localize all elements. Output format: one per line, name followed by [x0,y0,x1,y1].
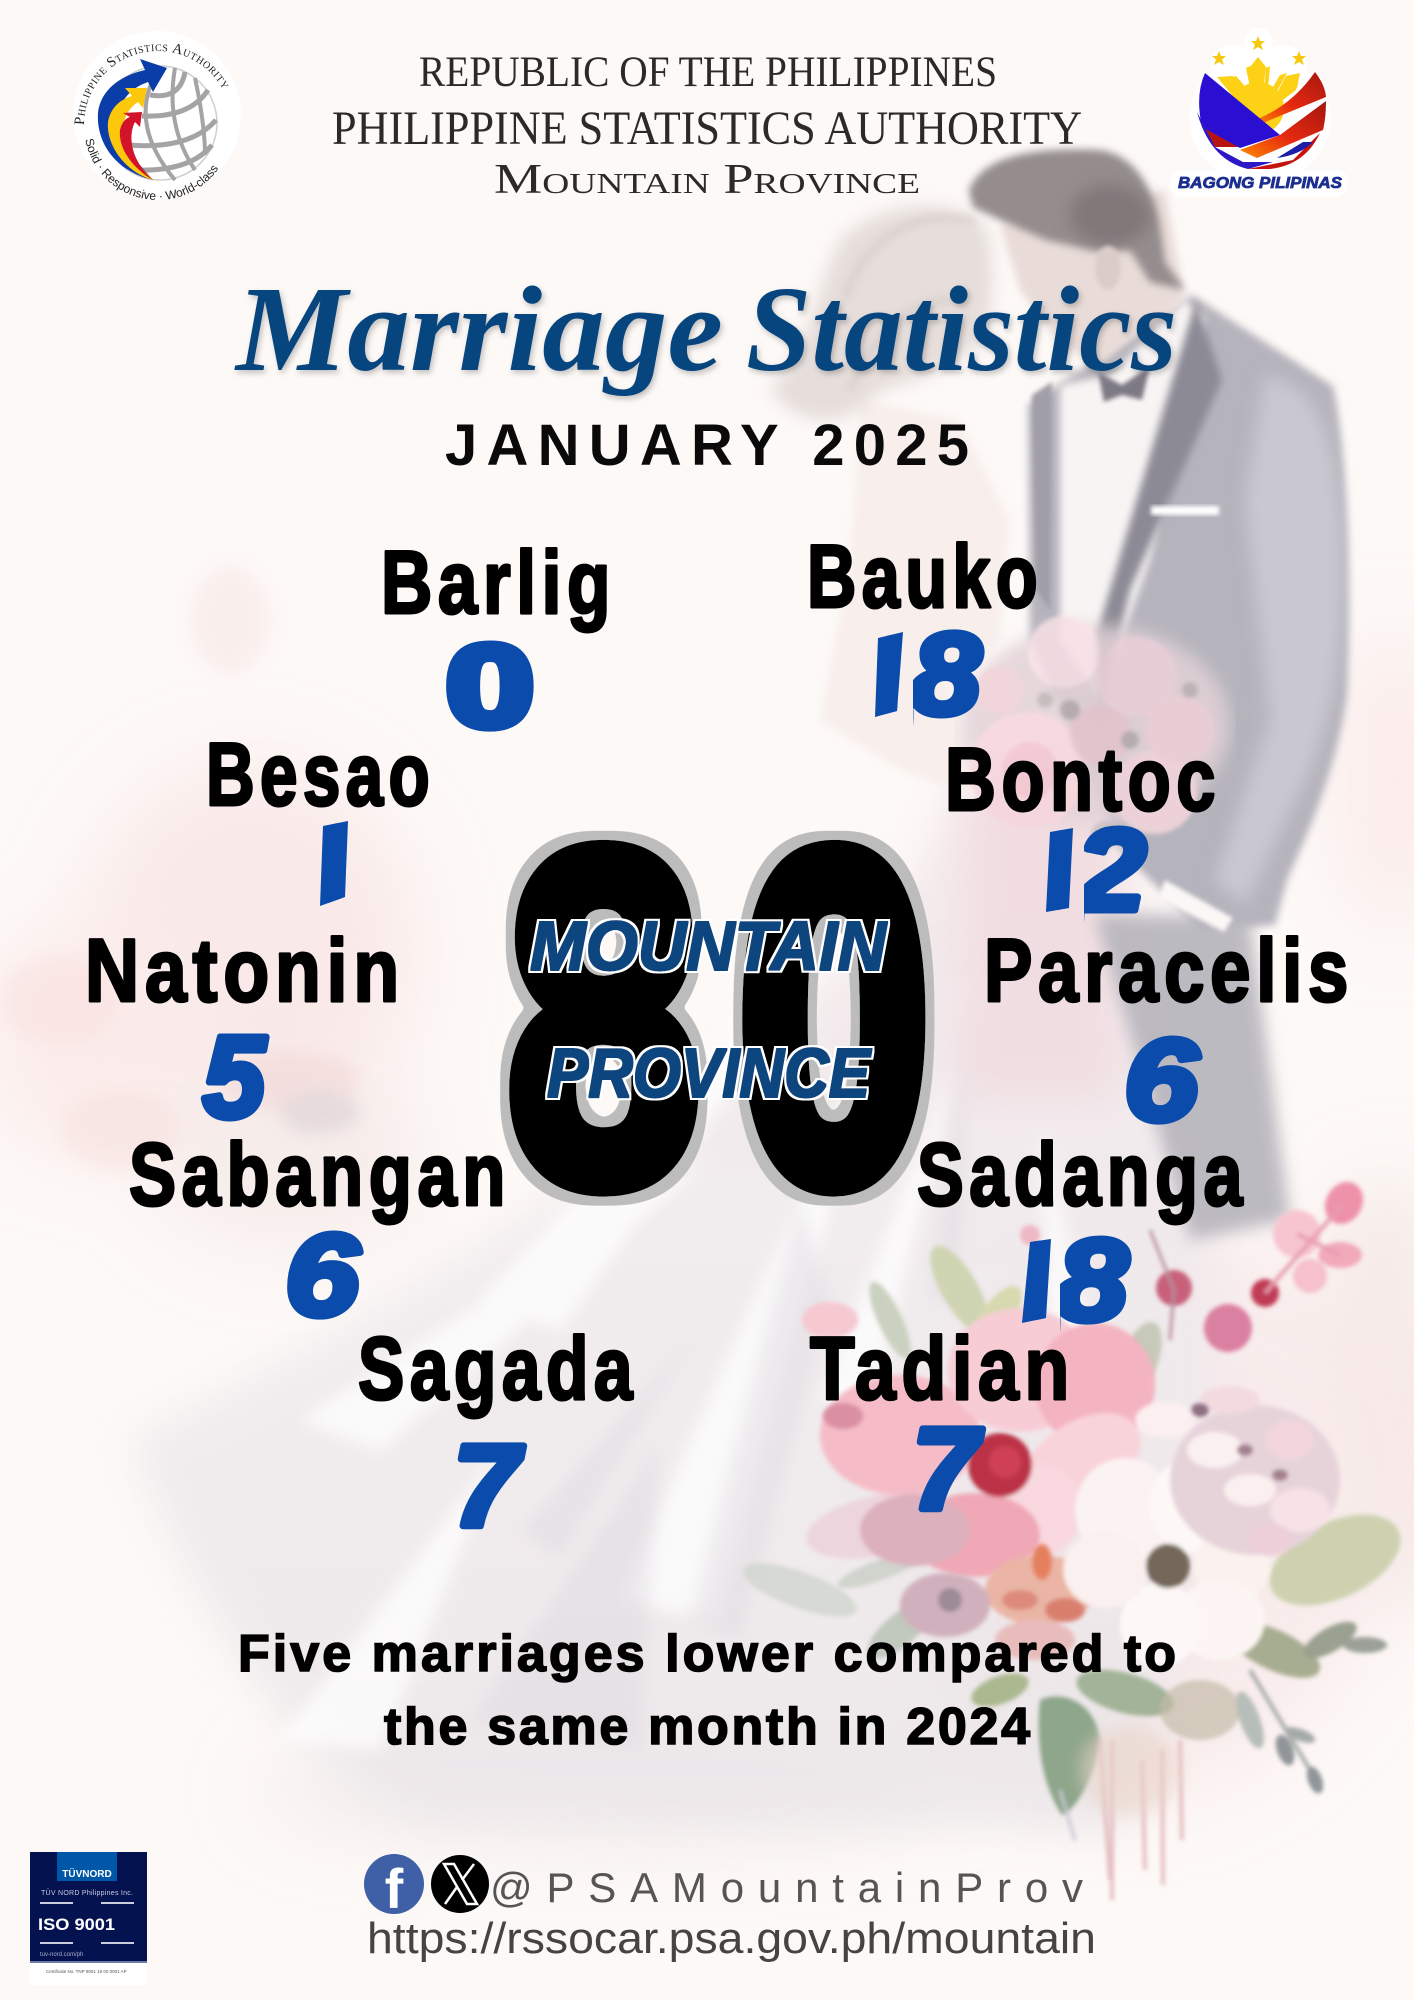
white cluster [1135,1386,1340,1556]
municipality: Besao [209,742,428,906]
leaves [737,1238,1414,1815]
note line 1: Five marriages lower compared to [238,1625,1176,1683]
municipality: Sadanga: 1 [1026,1215,1046,1345]
hair [969,149,1185,290]
logo motto text: Solid · Responsive · World-class [86,138,218,200]
logo ring text: Philippine Statistics Authority [74,44,228,125]
municipality: Sabangan: Sabangan [129,1124,511,1224]
globe [103,66,217,180]
red bands [1250,72,1326,125]
municipality: Sadanga: Sadanga [917,1124,1248,1224]
cuff [1158,880,1233,932]
municipality: Bauko: 8 [911,609,982,739]
municipality: Sagada [358,1318,638,1551]
jacket [1028,295,1349,930]
arm and torso [820,400,1010,800]
header: agency text [332,49,1082,203]
municipality: Paracelis: 6 [1124,1015,1200,1145]
municipality: Bontoc: 1 [1050,805,1070,935]
white flower [1063,1457,1270,1667]
municipality: Tadian [810,1318,1075,1534]
label line 2: PROVINCE [547,1034,872,1112]
pocket square [1151,506,1219,515]
header line 1: REPUBLIC OF THE PHILIPPINES [419,49,997,96]
municipality: Sabangan [129,1124,511,1340]
badge: ISO 9001: ISO 9001 [38,1915,115,1934]
municipality: Bontoc [948,747,1215,922]
neck and face [1000,190,1185,365]
municipality: Sadanga [918,1139,1244,1332]
logo: Bagong Pilipinas [1170,28,1348,197]
shirt [1060,300,1205,700]
label line 1: MOUNTAIN [530,907,887,985]
hair [770,206,992,420]
badge: ISO 9001: TÜV NORD Philippines Inc. [41,1889,133,1897]
pink flower [800,1308,1160,1577]
center label: mountain province [530,907,887,1112]
bow tie [1098,366,1150,402]
comparison note [238,1625,1176,1756]
icon: facebook [364,1854,424,1920]
illustration: floral arrangement [737,1175,1414,1900]
subtitle: month: JANUARY 2025 [445,413,969,478]
logo: Philippine Statistics Authority [74,44,228,200]
municipality: Sadanga: 8 [1056,1215,1129,1345]
trousers [1095,915,1290,1240]
municipality: Bauko [810,541,1036,726]
illustration: watercolor washes [0,565,1414,1840]
red arrow [120,112,153,180]
municipality: Bauko: Bauko [807,526,1043,626]
municipality: Sagada: 7 [453,1421,525,1551]
website url: https://rssocar.psa.gov.ph/mountain [367,1914,1096,1963]
paint drips [1060,1740,1182,1900]
municipality: Barlig: Barlig [381,532,616,632]
badge: ISO 9001: Certificate No. TNP 9001 19 00 0001 AP [46,1969,127,1974]
logo wordmark: BAGONG PILIPINAS [1178,175,1342,192]
blue bands [1199,73,1280,148]
illustration: bouquet [960,616,1230,849]
municipality: Natonin: 5 [203,1012,266,1142]
illustration: bride dress [130,760,1214,1830]
municipality: Barlig: 0 [446,621,534,751]
municipality: Besao: 1 [324,798,344,928]
municipality: Bontoc: Bontoc [945,729,1221,829]
municipality: Tadian: 7 [912,1404,984,1534]
illustration: bride [770,206,1010,800]
municipality: Paracelis [984,920,1354,1145]
stars [1212,36,1306,65]
yellow arrow [108,88,153,180]
social handle: @PSAMountainProv [490,1864,1083,1911]
header line 3: Mountain Province [494,157,920,203]
badge: ISO 9001 [30,1852,147,1985]
blue arrow [98,59,167,180]
municipality: Natonin: Natonin [85,920,405,1020]
badge: ISO 9001: tuv-nord.com/ph [40,1952,83,1958]
municipality: Sagada: Sagada [358,1318,638,1418]
berries [802,1175,1371,1429]
municipality: Bontoc: 2 [1074,805,1146,935]
small coral flowers [900,1544,1095,1660]
icon: X [431,1855,489,1913]
municipality: Natonin [85,920,405,1142]
lapels [1095,300,1222,720]
municipality: Bauko: 1 [879,609,899,739]
icon: facebook: f [385,1857,404,1920]
title: Marriage [234,262,723,397]
illustration: groom [969,149,1349,1240]
municipality: Barlig [381,532,616,751]
header line 2: PHILIPPINE STATISTICS AUTHORITY [332,102,1082,155]
note line 2: the same month in 2024 [384,1698,1030,1756]
title: Statistics [746,262,1177,397]
badge: ISO 9001: TÜVNORD [62,1867,112,1880]
total: 80: 80 [507,755,968,1280]
sun [1217,57,1300,134]
municipality: Besao: Besao [206,724,435,824]
municipality: Tadian: Tadian [810,1318,1075,1418]
municipality: Sabangan: 6 [285,1210,361,1340]
